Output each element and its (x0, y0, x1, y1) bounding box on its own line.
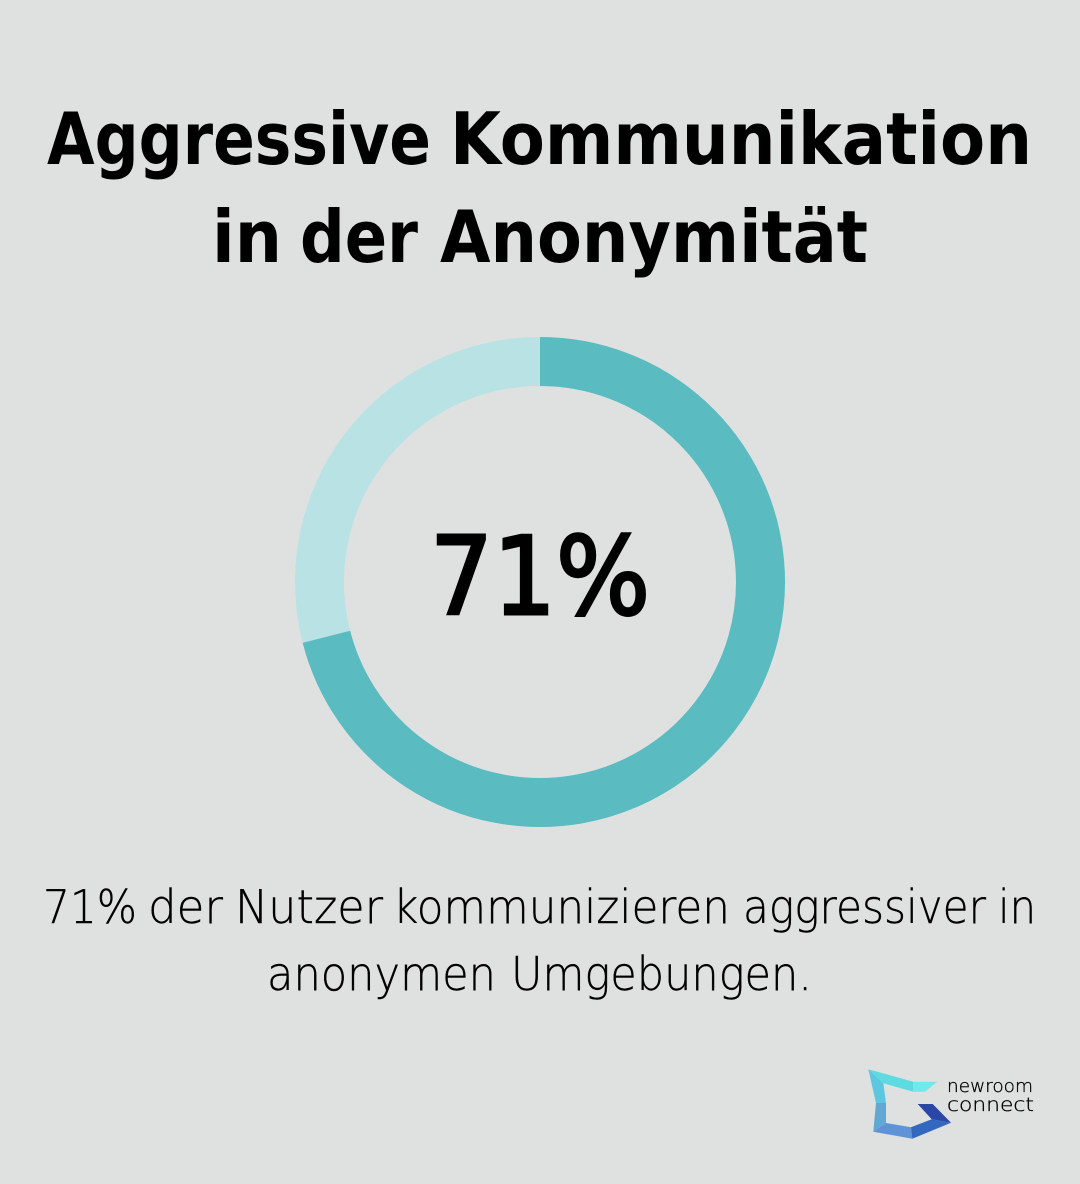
title: der (300, 195, 418, 279)
logo text: connect (947, 1094, 1034, 1116)
donut chart: 71% (320, 362, 760, 802)
caption: 71% (43, 880, 137, 934)
caption: der (148, 880, 223, 934)
logo text: newroom (947, 1076, 1033, 1097)
caption (43, 880, 1036, 1001)
caption: kommunizieren (393, 880, 730, 934)
71% segment (326, 362, 760, 802)
caption: anonymen (267, 947, 496, 1001)
caption: in (998, 880, 1036, 934)
center value: 71% (430, 515, 650, 640)
caption: Nutzer (235, 880, 383, 934)
title: Kommunikation (450, 97, 1032, 181)
title: Anonymität (440, 195, 868, 279)
logo: newroom connect (868, 1069, 1034, 1139)
logo text (947, 1076, 1034, 1116)
caption: Umgebungen. (511, 947, 812, 1001)
remaining 29% segment (320, 362, 760, 802)
caption: aggressiver (743, 880, 986, 934)
title: Aggressive (47, 97, 431, 181)
title (47, 97, 1032, 279)
title: in (212, 195, 282, 279)
logo mark (868, 1069, 951, 1139)
